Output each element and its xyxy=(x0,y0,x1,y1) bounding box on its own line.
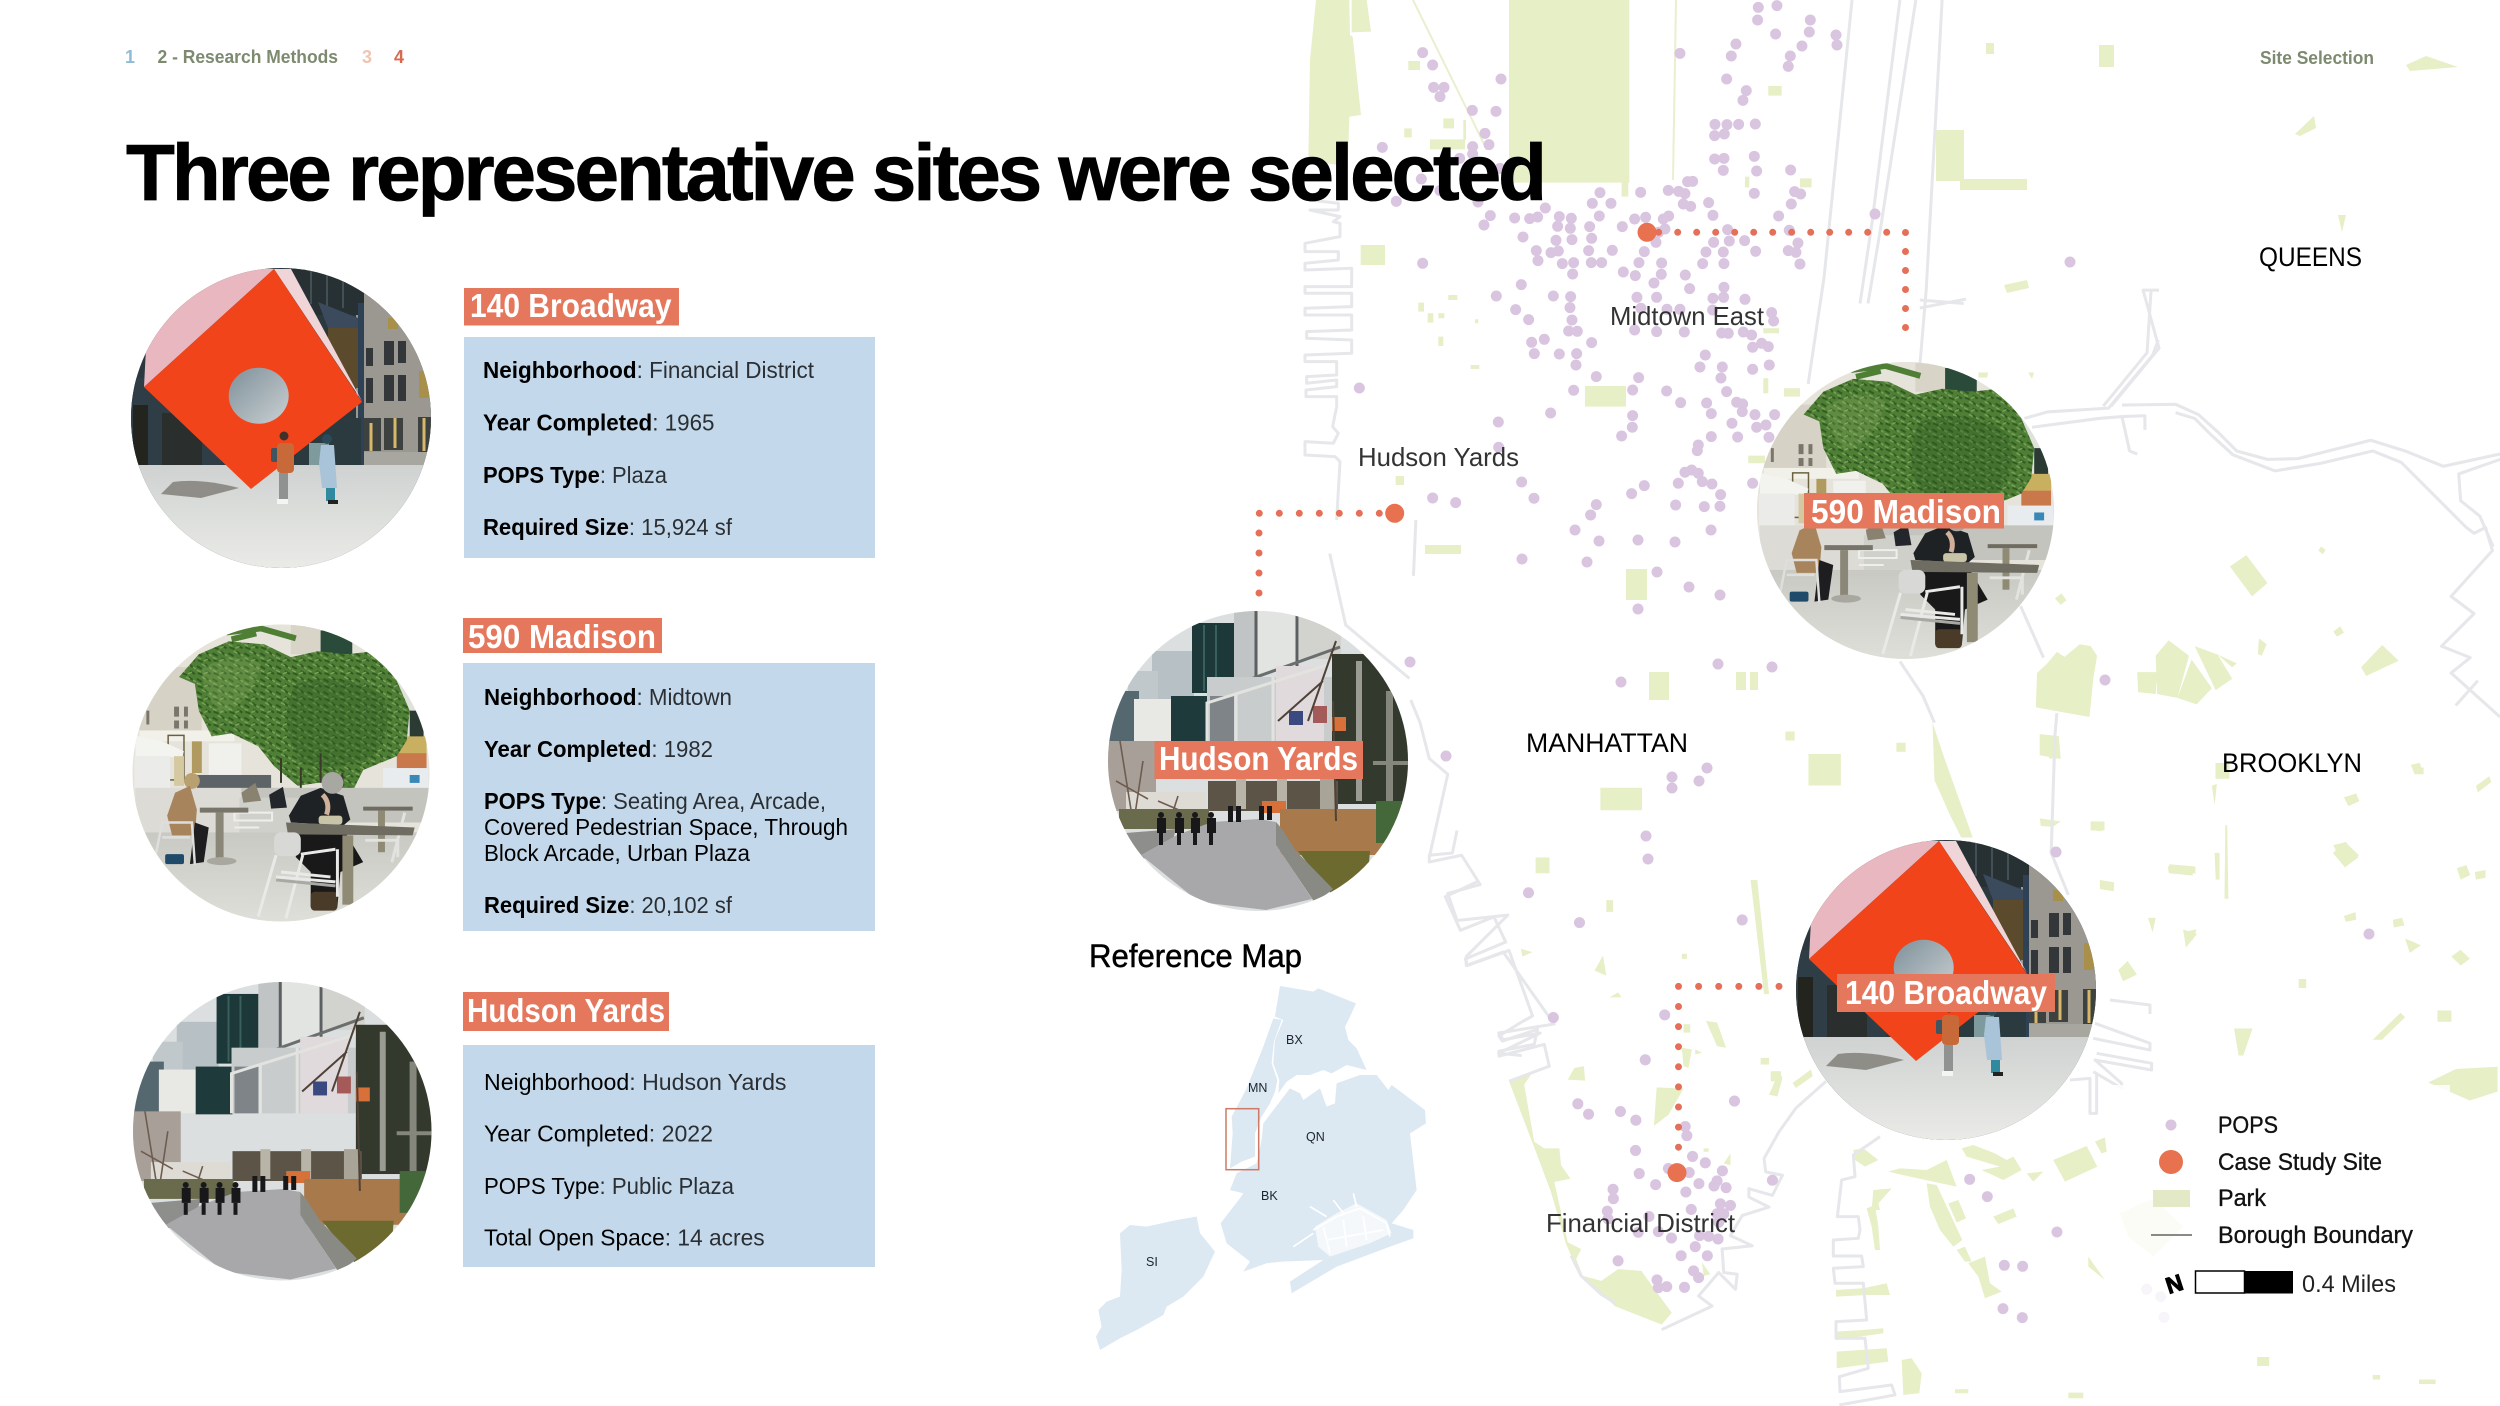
photo: 140 Broadway xyxy=(131,268,436,568)
info box: POPS Type: Seating Area, Arcade, xyxy=(484,788,826,814)
map extent box xyxy=(1226,1109,1259,1170)
reference map xyxy=(1089,938,1426,1350)
info box: Year Completed: 1982 xyxy=(484,736,713,762)
panel: 590 Madison xyxy=(132,618,875,931)
info box: Year Completed: 2022 xyxy=(484,1120,713,1146)
map label: MANHATTAN: MANHATTAN xyxy=(1526,728,1688,758)
heading: Reference Map: Reference Map xyxy=(1089,938,1302,974)
info box xyxy=(464,337,875,558)
map photo callout: 140 Broadway: 140 Broadway xyxy=(1845,974,2048,1011)
info box: Year Completed: 1965 xyxy=(483,410,714,436)
panel: 140 Broadway xyxy=(131,268,875,568)
legend: Park: Park xyxy=(2218,1185,2267,1212)
map photo callout: 590 Madison xyxy=(1757,362,2054,659)
map photo callout: 590 Madison: 590 Madison xyxy=(1811,493,2001,530)
breadcrumb navigation: 2 - Research Methods xyxy=(158,47,338,67)
borough labels: BK xyxy=(1261,1189,1278,1203)
info box: Neighborhood: Midtown xyxy=(484,684,732,710)
map label: Financial District: Financial District xyxy=(1546,1208,1736,1238)
info box: Required Size: 20,102 sf xyxy=(484,892,733,918)
photo: Hudson Yards xyxy=(133,982,432,1280)
info box: Neighborhood: Hudson Yards xyxy=(484,1069,786,1095)
map photo callout: 140 Broadway xyxy=(1796,840,2101,1140)
heading tag: 590 Madison xyxy=(468,618,656,655)
breadcrumb navigation: 1 xyxy=(125,47,135,67)
info box: Neighborhood: Financial District xyxy=(483,357,815,383)
legend: POPS xyxy=(2166,1112,2278,1139)
map label: BROOKLYN: BROOKLYN xyxy=(2222,748,2362,778)
map label: Midtown East: Midtown East xyxy=(1610,301,1765,331)
legend: Case Study Site: Case Study Site xyxy=(2218,1149,2382,1176)
legend: Borough Boundary: Borough Boundary xyxy=(2218,1222,2413,1249)
scale bar xyxy=(2196,1271,2396,1298)
breadcrumb navigation: 3 xyxy=(362,47,372,67)
photo: 590 Madison xyxy=(132,624,430,922)
title: Three representative sites were selected xyxy=(126,128,1547,217)
case study marker: 140 Broadway xyxy=(1668,1163,1686,1182)
thin green avenues xyxy=(1413,0,1676,180)
legend: POPS: POPS xyxy=(2218,1112,2278,1139)
case study marker: 590 Madison xyxy=(1638,223,1656,242)
borough labels: BX xyxy=(1286,1033,1303,1047)
map label: Hudson Yards: Hudson Yards xyxy=(1358,442,1519,472)
info box: POPS Type: Plaza xyxy=(483,462,667,488)
heading tag: 140 Broadway xyxy=(470,287,672,324)
borough labels: MN xyxy=(1248,1081,1267,1095)
info box: Block Arcade, Urban Plaza xyxy=(484,840,750,866)
breadcrumb navigation xyxy=(125,47,404,67)
case study marker: Hudson Yards xyxy=(1385,504,1404,523)
map: parks, boundaries and POPS xyxy=(1305,0,2500,1405)
info box: Required Size: 15,924 sf xyxy=(483,514,733,540)
info box xyxy=(463,1045,875,1267)
borough boundaries xyxy=(1305,0,2500,1405)
borough labels xyxy=(1146,1033,1325,1269)
parks xyxy=(1308,0,2498,1398)
info box: POPS Type: Public Plaza xyxy=(484,1173,734,1199)
borough labels: QN xyxy=(1306,1130,1325,1144)
section label: Site Selection xyxy=(2260,48,2374,68)
dotted connector: 590 Madison xyxy=(1659,232,1906,346)
dotted connector: Hudson Yards xyxy=(1259,513,1379,608)
north arrow: N xyxy=(2162,1269,2186,1299)
panel: Hudson Yards xyxy=(133,982,875,1280)
map photo callout: Hudson Yards: Hudson Yards xyxy=(1159,740,1358,777)
info box xyxy=(463,663,875,931)
legend backdrop xyxy=(2110,1085,2450,1340)
POPS dots xyxy=(1359,6,2369,1318)
borough labels: SI xyxy=(1146,1255,1158,1269)
legend: Park xyxy=(2153,1185,2267,1212)
dotted connector: 140 Broadway xyxy=(1678,986,1779,1157)
boroughs xyxy=(1096,986,1426,1350)
info box: Covered Pedestrian Space, Through xyxy=(484,814,848,840)
heading tag: Hudson Yards xyxy=(467,992,665,1029)
scale bar: 0.4 Miles xyxy=(2302,1271,2396,1298)
map label: QUEENS: QUEENS xyxy=(2259,242,2362,272)
legend xyxy=(2151,1112,2413,1299)
map photo callout: Hudson Yards xyxy=(1108,611,1408,911)
breadcrumb navigation: 4 xyxy=(394,47,404,67)
info box: Total Open Space: 14 acres xyxy=(484,1224,765,1250)
